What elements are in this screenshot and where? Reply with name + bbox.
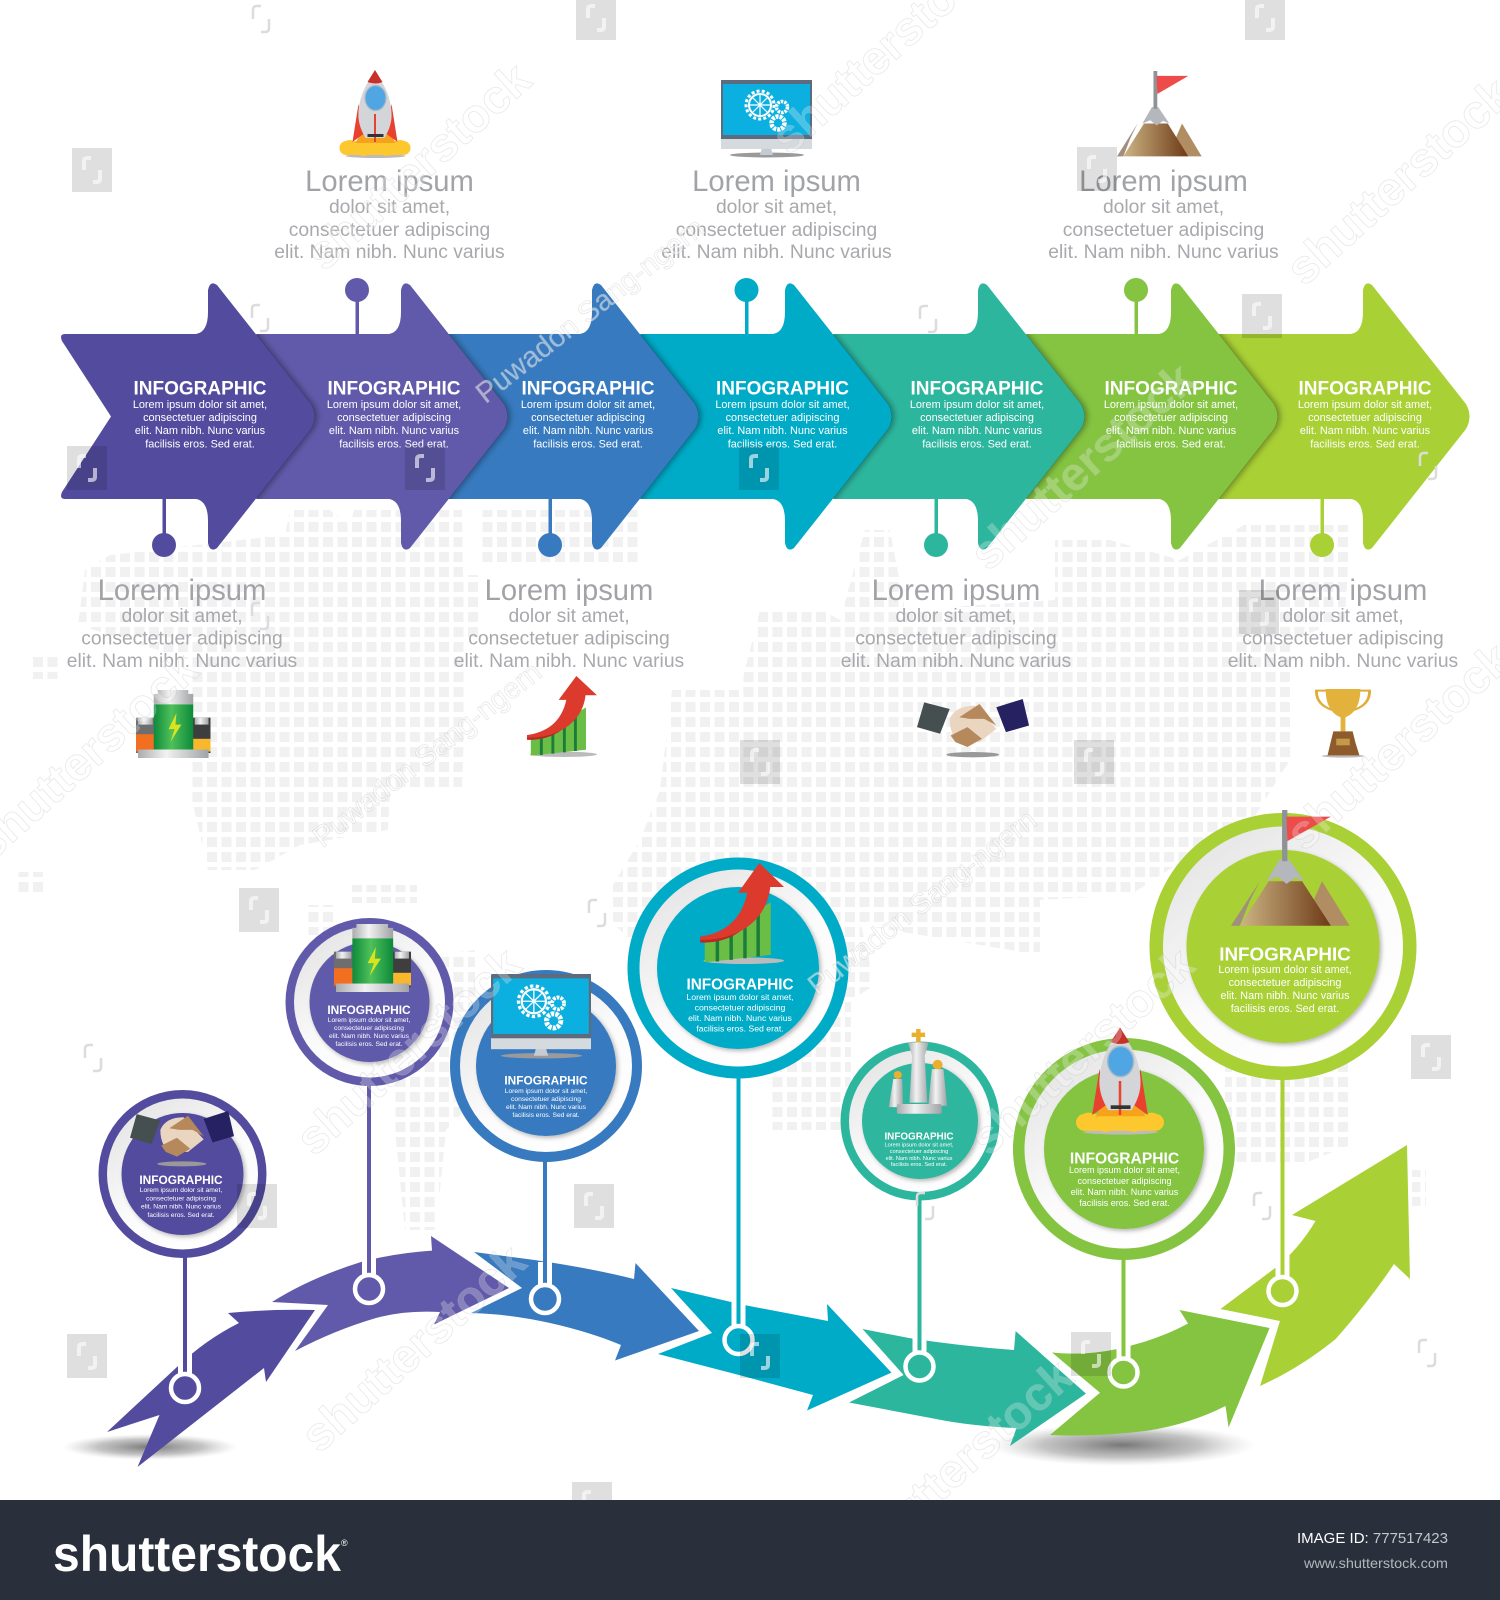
- caption 7: elit. Nam nibh. Nunc varius: [1228, 651, 1458, 672]
- arrow 5 text: consectetuer adipiscing: [920, 412, 1034, 424]
- pins: timeline connectors: [152, 278, 1334, 557]
- curved arrow segment 5: [849, 1329, 1086, 1446]
- website: www.shutterstock.com: [1303, 1555, 1448, 1571]
- arrow 5 text: Lorem ipsum dolor sit amet,: [910, 399, 1044, 411]
- arrow 5 text: elit. Nam nibh. Nunc varius: [912, 425, 1043, 437]
- arrow 3 text: facilisis eros. Sed erat.: [533, 438, 643, 450]
- footer brand: shutterstock: [53, 1526, 341, 1582]
- arrow 6 text: Lorem ipsum dolor sit amet,: [1104, 399, 1238, 411]
- arrow 4 text: consectetuer adipiscing: [726, 412, 839, 424]
- stem 1: [171, 1255, 199, 1402]
- circle 6 text: INFOGRAPHIC: [1070, 1150, 1179, 1168]
- caption 1: [67, 575, 297, 672]
- curved arrow segment 2: [272, 1236, 509, 1351]
- arrow 3 text: [521, 378, 655, 450]
- pin 3: [538, 495, 562, 557]
- arrow 4 text: INFOGRAPHIC: [716, 378, 849, 400]
- icon: rocket: [1076, 1028, 1164, 1134]
- circle 2 text: [327, 1003, 411, 1048]
- arrow 2: [254, 283, 508, 550]
- arrow 7 text: Lorem ipsum dolor sit amet,: [1298, 399, 1432, 411]
- caption 5: Lorem ipsum: [872, 575, 1040, 607]
- caption 6: [1048, 166, 1279, 263]
- circle 3 text: facilisis eros. Sed erat.: [512, 1112, 580, 1119]
- icon: chess pieces: [889, 1029, 947, 1114]
- arrow 3 text: Lorem ipsum dolor sit amet,: [521, 399, 655, 411]
- arrow 1 text: facilisis eros. Sed erat.: [145, 438, 255, 450]
- arrow 7: [1216, 283, 1470, 550]
- circle 3 text: elit. Nam nibh. Nunc varius: [506, 1104, 587, 1111]
- circle 7 text: facilisis eros. Sed erat.: [1231, 1003, 1339, 1015]
- watermark overlays: shutterstock: [290, 1233, 536, 1462]
- stem 3: [531, 1160, 559, 1313]
- caption 3: [454, 575, 684, 672]
- watermark overlays: shutterstock: [285, 936, 531, 1165]
- arrow 6 text: consectetuer adipiscing: [1114, 412, 1228, 424]
- caption 6: Lorem ipsum: [1079, 166, 1248, 198]
- caption 5: [841, 575, 1071, 672]
- arrow 5: [831, 283, 1084, 550]
- arrow 1 text: INFOGRAPHIC: [134, 378, 267, 400]
- circle 4 text: INFOGRAPHIC: [686, 976, 794, 994]
- circle 2 text: consectetuer adipiscing: [334, 1025, 404, 1032]
- curved arrow segment 4: [658, 1288, 892, 1410]
- arrow 2 text: INFOGRAPHIC: [328, 378, 461, 400]
- caption 7: consectetuer adipiscing: [1242, 628, 1444, 650]
- pin 2: [345, 278, 369, 337]
- circle 7 text: elit. Nam nibh. Nunc varius: [1220, 990, 1350, 1002]
- panel: chevron arrow timeline: [61, 283, 1470, 550]
- caption 4: consectetuer adipiscing: [676, 220, 877, 241]
- circle 7 text: consectetuer adipiscing: [1229, 977, 1341, 989]
- caption 6: elit. Nam nibh. Nunc varius: [1048, 242, 1279, 263]
- arrow 3 text: elit. Nam nibh. Nunc varius: [523, 425, 654, 437]
- caption 2: consectetuer adipiscing: [289, 220, 490, 241]
- icon: rocket: [340, 70, 410, 158]
- circle 4 text: elit. Nam nibh. Nunc varius: [688, 1013, 793, 1023]
- watermark overlays: shutterstock: [959, 936, 1205, 1165]
- arrow 1 text: elit. Nam nibh. Nunc varius: [135, 425, 266, 437]
- pin 7: [1310, 495, 1334, 557]
- icon: trophy: [1316, 689, 1370, 758]
- circle 3 text: INFOGRAPHIC: [504, 1074, 588, 1088]
- circle 7 text: INFOGRAPHIC: [1219, 944, 1351, 964]
- caption 6: consectetuer adipiscing: [1063, 220, 1264, 241]
- circle 5 text: Lorem ipsum dolor sit amet,: [884, 1142, 954, 1148]
- circle 2 text: facilisis eros. Sed erat.: [335, 1041, 403, 1048]
- caption 7: Lorem ipsum: [1259, 575, 1427, 607]
- circle 5 text: consectetuer adipiscing: [890, 1149, 948, 1155]
- curved arrow segment 1: [107, 1310, 315, 1467]
- watermark overlays: Puwadon Sang-ngern: [307, 656, 548, 854]
- stem 6: [1110, 1258, 1138, 1386]
- arrow 3 text: INFOGRAPHIC: [522, 378, 655, 400]
- icon: growth chart arrow: [700, 863, 784, 964]
- arrow 7 text: facilisis eros. Sed erat.: [1310, 438, 1420, 450]
- arrow 6: [1024, 283, 1278, 550]
- circle 4 text: [686, 976, 794, 1034]
- icon: batteries: [136, 690, 210, 758]
- panel: arrow labels: [133, 378, 1432, 450]
- circle 5 text: INFOGRAPHIC: [884, 1132, 954, 1142]
- arrow 2 text: facilisis eros. Sed erat.: [339, 438, 449, 450]
- registered mark: ®: [341, 1538, 348, 1548]
- circle 4 text: facilisis eros. Sed erat.: [696, 1024, 784, 1034]
- caption 5: dolor sit amet,: [895, 606, 1017, 627]
- caption 4: elit. Nam nibh. Nunc varius: [661, 242, 892, 263]
- circle 1 text: Lorem ipsum dolor sit amet,: [140, 1187, 222, 1194]
- curved arrow segment 7: [1220, 1145, 1410, 1386]
- caption 3: consectetuer adipiscing: [468, 628, 670, 650]
- circle 2 text: elit. Nam nibh. Nunc varius: [329, 1033, 410, 1040]
- arrow 4 text: facilisis eros. Sed erat.: [728, 438, 837, 450]
- arrow 7 text: INFOGRAPHIC: [1298, 378, 1432, 400]
- circle 5 text: facilisis eros. Sed erat.: [891, 1162, 948, 1168]
- circle 3 text: [504, 1074, 588, 1119]
- caption 1: Lorem ipsum: [98, 575, 266, 607]
- circle 1 text: INFOGRAPHIC: [139, 1173, 223, 1187]
- circle 1 text: elit. Nam nibh. Nunc varius: [141, 1204, 222, 1210]
- circle 6 text: facilisis eros. Sed erat.: [1079, 1198, 1170, 1208]
- circle 6 text: Lorem ipsum dolor sit amet,: [1069, 1165, 1180, 1175]
- caption 2: dolor sit amet,: [329, 197, 450, 218]
- watermark overlays: shutterstock: [959, 351, 1205, 580]
- caption 2: [274, 166, 505, 263]
- arrow 6 text: [1104, 378, 1238, 450]
- icon: mountain with flag: [1231, 810, 1350, 926]
- arrow 5 text: INFOGRAPHIC: [910, 378, 1044, 400]
- arrow 1: [61, 283, 314, 550]
- arrow 2 text: elit. Nam nibh. Nunc varius: [329, 425, 460, 437]
- arrow 1 text: Lorem ipsum dolor sit amet,: [133, 399, 267, 411]
- arrow 2 text: Lorem ipsum dolor sit amet,: [327, 399, 461, 411]
- caption 1: elit. Nam nibh. Nunc varius: [67, 651, 297, 672]
- ground shadow right: [989, 1424, 1255, 1466]
- stem 2: [355, 1085, 383, 1303]
- caption 4: Lorem ipsum: [692, 166, 861, 198]
- arrow 2 text: [327, 378, 461, 450]
- caption 3: Lorem ipsum: [485, 575, 653, 607]
- icon: monitor with gears: [721, 80, 812, 158]
- icon: mountain with flag: [1117, 71, 1202, 156]
- icon: handshake: [130, 1111, 234, 1166]
- circle 5 text: elit. Nam nibh. Nunc varius: [886, 1156, 953, 1162]
- pin 5: [924, 495, 948, 557]
- watermark overlays: Puwadon Sang-ngern: [470, 212, 711, 410]
- caption 3: elit. Nam nibh. Nunc varius: [454, 651, 684, 672]
- panel: top captions: [274, 166, 1279, 263]
- arrow 1 text: [133, 378, 267, 450]
- panel: bottom captions: [67, 575, 1458, 672]
- circle 7 text: [1218, 944, 1352, 1015]
- panel: circle 1: [98, 1090, 266, 1258]
- caption 6: dolor sit amet,: [1103, 197, 1224, 218]
- stem 4: [724, 1078, 752, 1354]
- caption 4: [661, 166, 892, 263]
- arrow 6 text: facilisis eros. Sed erat.: [1116, 438, 1226, 450]
- pin 4: [734, 278, 758, 337]
- arrow 3: [445, 283, 698, 550]
- caption 1: consectetuer adipiscing: [81, 628, 283, 650]
- circle 4 text: consectetuer adipiscing: [695, 1002, 786, 1012]
- circle 7 text: Lorem ipsum dolor sit amet,: [1218, 964, 1352, 976]
- caption 3: dolor sit amet,: [508, 606, 630, 627]
- icon: monitor with gears: [491, 974, 591, 1058]
- panel: circle 2: [286, 918, 454, 1086]
- circle 3 text: Lorem ipsum dolor sit amet,: [505, 1088, 587, 1095]
- caption 2: elit. Nam nibh. Nunc varius: [274, 242, 505, 263]
- stem 5: [906, 1200, 934, 1380]
- panel: circle 4: [628, 858, 848, 1078]
- background world map of dots: [18, 510, 1426, 1230]
- watermark overlays: shutterstock: [837, 1348, 1083, 1577]
- arrow 1 text: consectetuer adipiscing: [143, 412, 257, 424]
- panel: circle 3: [450, 970, 642, 1162]
- icon: handshake: [917, 699, 1029, 757]
- watermark overlays: Puwadon Sang-ngern: [802, 804, 1043, 1002]
- arrow 4: [638, 283, 892, 550]
- arrow 3 text: consectetuer adipiscing: [531, 412, 645, 424]
- arrow 6 text: INFOGRAPHIC: [1104, 378, 1238, 400]
- footer bar: [0, 1500, 1500, 1600]
- arrow 7 text: [1298, 378, 1432, 450]
- panel: circle 6: [1013, 1028, 1235, 1260]
- arrow 4 text: elit. Nam nibh. Nunc varius: [717, 425, 848, 437]
- arrow 4 text: [715, 378, 850, 450]
- panel: circle 7: [1150, 810, 1416, 1080]
- arrow 7 text: consectetuer adipiscing: [1308, 412, 1422, 424]
- curved arrow segment 3: [471, 1252, 699, 1360]
- pin 1: [152, 495, 176, 557]
- icon: batteries: [334, 924, 411, 992]
- caption 4: dolor sit amet,: [716, 197, 837, 218]
- caption 7: dolor sit amet,: [1282, 606, 1404, 627]
- arrow 7 text: elit. Nam nibh. Nunc varius: [1300, 425, 1431, 437]
- curved arrow segment 6: [1050, 1310, 1270, 1435]
- circle 6 text: elit. Nam nibh. Nunc varius: [1071, 1187, 1179, 1197]
- caption 1: dolor sit amet,: [121, 606, 243, 627]
- arrow 5 text: facilisis eros. Sed erat.: [922, 438, 1032, 450]
- arrow 2 text: consectetuer adipiscing: [337, 412, 451, 424]
- caption 5: elit. Nam nibh. Nunc varius: [841, 651, 1071, 672]
- caption 7: [1228, 575, 1458, 672]
- arrow 4 text: Lorem ipsum dolor sit amet,: [715, 399, 850, 411]
- arrow 5 text: [910, 378, 1044, 450]
- panel: curved growth arrow: [107, 1145, 1410, 1467]
- pin 6: [1124, 278, 1148, 337]
- caption 5: consectetuer adipiscing: [855, 628, 1057, 650]
- circle 5 text: [884, 1132, 954, 1168]
- icon: growth chart arrow: [527, 676, 597, 757]
- panel: stems and rings: [171, 1078, 1296, 1402]
- ground shadow left: [62, 1434, 238, 1460]
- circle 4 text: Lorem ipsum dolor sit amet,: [686, 992, 794, 1002]
- circle 6 text: [1069, 1150, 1180, 1208]
- image id: IMAGE ID: 777517423: [1297, 1530, 1448, 1547]
- caption 2: Lorem ipsum: [305, 166, 474, 198]
- circle 3 text: consectetuer adipiscing: [511, 1096, 581, 1103]
- circle 1 text: facilisis eros. Sed erat.: [147, 1212, 215, 1219]
- arrow 6 text: elit. Nam nibh. Nunc varius: [1106, 425, 1237, 437]
- circle 1 text: [139, 1173, 223, 1219]
- stem 7: [1268, 1078, 1296, 1305]
- watermark overlays: shutterstock: [295, 51, 541, 280]
- circle 2 text: Lorem ipsum dolor sit amet,: [328, 1017, 410, 1024]
- circle 6 text: consectetuer adipiscing: [1077, 1176, 1172, 1186]
- circle 2 text: INFOGRAPHIC: [327, 1003, 411, 1017]
- circle 1 text: consectetuer adipiscing: [146, 1196, 216, 1202]
- panel: circle 5: [840, 1029, 1000, 1200]
